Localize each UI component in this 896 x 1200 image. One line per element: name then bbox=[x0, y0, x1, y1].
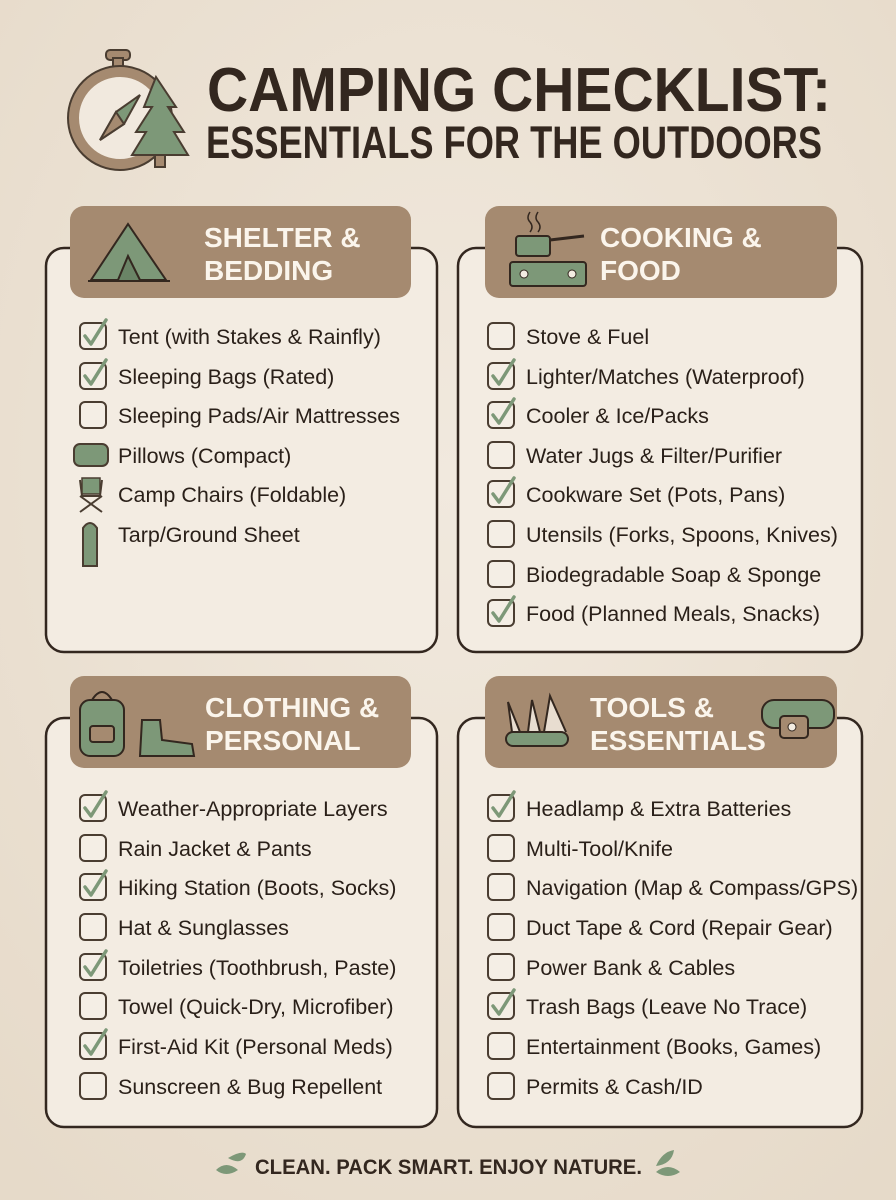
checklist: tools: Duct Tape & Cord (Repair Gear) bbox=[526, 916, 833, 940]
panel: shelter & bedding bbox=[46, 206, 437, 652]
header: shelter & bedding bbox=[70, 206, 411, 298]
checklist: clothing: Towel (Quick-Dry, Microfiber) bbox=[118, 995, 394, 1019]
checklist: cooking: Food (Planned Meals, Snacks) bbox=[526, 602, 820, 626]
footer: CLEAN. PACK SMART. ENJOY NATURE. bbox=[255, 1156, 642, 1179]
checklist: cooking: Stove & Fuel bbox=[526, 325, 649, 349]
title: CAMPING CHECKLIST: bbox=[207, 56, 831, 125]
checklist: clothing: Weather-Appropriate Layers bbox=[118, 797, 388, 821]
header: tools & essentials bbox=[485, 676, 837, 768]
panel: clothing & personal bbox=[46, 676, 437, 1127]
header: clothing & personal bbox=[70, 676, 411, 768]
checklist: tools: Headlamp & Extra Batteries bbox=[526, 797, 791, 821]
checklist: shelter: Pillows (Compact) bbox=[118, 444, 291, 468]
checklist: clothing: Hiking Station (Boots, Socks) bbox=[118, 876, 396, 900]
checklist: cooking: Lighter/Matches (Waterproof) bbox=[526, 365, 805, 389]
header: tools & essentials: TOOLS & bbox=[590, 692, 714, 723]
checklist: cooking: Water Jugs & Filter/Purifier bbox=[526, 444, 782, 468]
footer bbox=[216, 1150, 680, 1179]
checklist: tools bbox=[488, 792, 858, 1099]
checklist: shelter: Camp Chairs (Foldable) bbox=[118, 483, 346, 507]
checklist: clothing: Rain Jacket & Pants bbox=[118, 837, 312, 861]
checklist: tools: Permits & Cash/ID bbox=[526, 1075, 703, 1099]
checklist: shelter: Sleeping Bags (Rated) bbox=[118, 365, 334, 389]
checklist: tools: Entertainment (Books, Games) bbox=[526, 1035, 821, 1059]
icon: compass and tree bbox=[74, 50, 188, 167]
panel: tools & essentials bbox=[458, 676, 862, 1127]
panel: cooking & food bbox=[458, 206, 862, 652]
header: cooking & food: COOKING & bbox=[600, 222, 762, 253]
checklist: clothing: Hat & Sunglasses bbox=[118, 916, 289, 940]
checklist: clothing: Sunscreen & Bug Repellent bbox=[118, 1075, 382, 1099]
checklist: clothing bbox=[80, 792, 396, 1099]
checklist: shelter: Tent (with Stakes & Rainfly) bbox=[118, 325, 381, 349]
header: clothing & personal: CLOTHING & bbox=[205, 692, 379, 723]
header: clothing & personal: PERSONAL bbox=[205, 725, 361, 756]
checklist: cooking: Cookware Set (Pots, Pans) bbox=[526, 483, 785, 507]
checklist: clothing: Toiletries (Toothbrush, Paste) bbox=[118, 956, 396, 980]
checklist: cooking: Utensils (Forks, Spoons, Knives) bbox=[526, 523, 838, 547]
checklist: shelter bbox=[74, 320, 400, 566]
checklist: shelter: Tarp/Ground Sheet bbox=[118, 523, 300, 547]
checklist: cooking: Biodegradable Soap & Sponge bbox=[526, 563, 821, 587]
checklist: tools: Power Bank & Cables bbox=[526, 956, 735, 980]
checklist: tools: Navigation (Map & Compass/GPS) bbox=[526, 876, 858, 900]
header: tools & essentials: ESSENTIALS bbox=[590, 725, 766, 756]
checklist: clothing: First-Aid Kit (Personal Meds) bbox=[118, 1035, 393, 1059]
header: shelter & bedding: SHELTER & bbox=[204, 222, 361, 253]
checklist: shelter: Sleeping Pads/Air Mattresses bbox=[118, 404, 400, 428]
header: cooking & food: FOOD bbox=[600, 255, 681, 286]
checklist: tools: Multi-Tool/Knife bbox=[526, 837, 673, 861]
title bbox=[206, 56, 831, 168]
header: cooking & food bbox=[485, 206, 837, 298]
checklist: cooking bbox=[488, 323, 838, 626]
checklist: tools: Trash Bags (Leave No Trace) bbox=[526, 995, 807, 1019]
checklist: cooking: Cooler & Ice/Packs bbox=[526, 404, 709, 428]
header: shelter & bedding: BEDDING bbox=[204, 255, 333, 286]
